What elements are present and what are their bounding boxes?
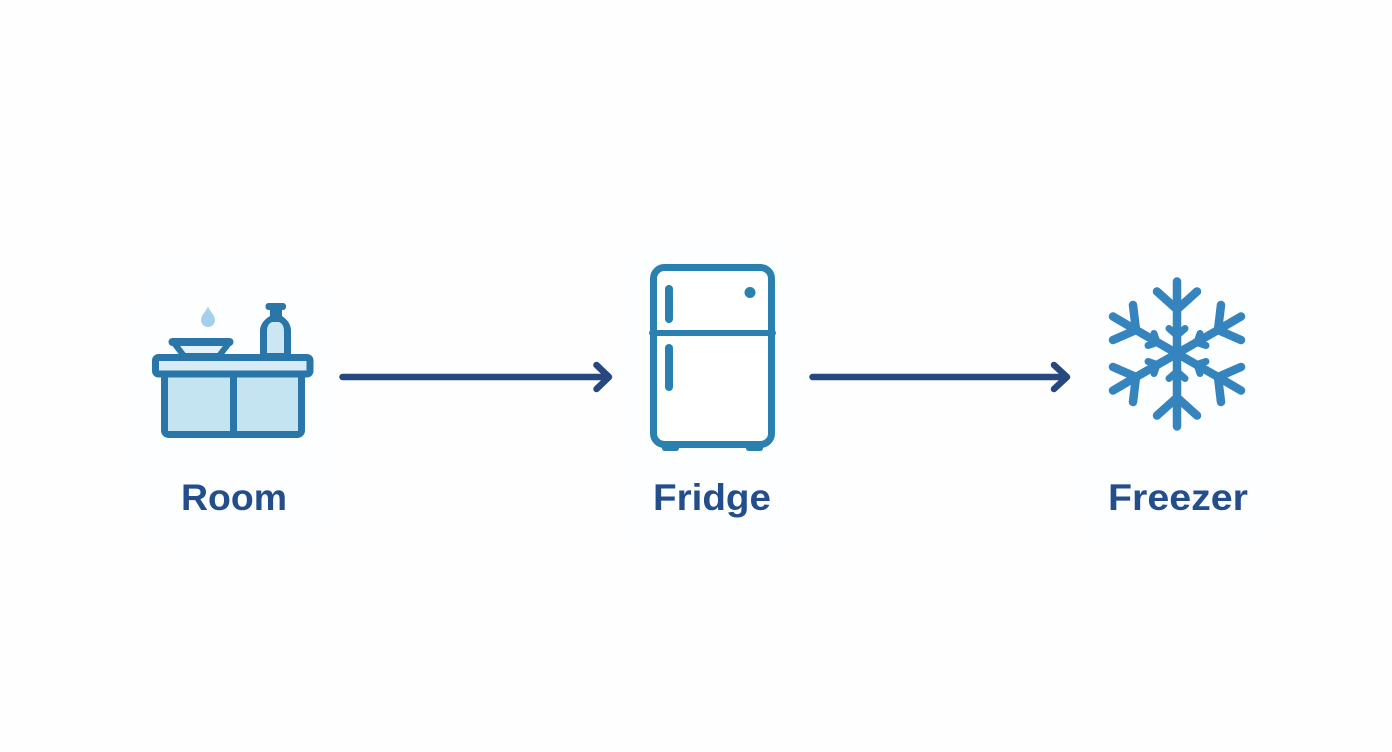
icon: fridge: [649, 268, 776, 451]
label: fridge: Fridge: [653, 477, 771, 518]
icon: indicator dot: [744, 287, 756, 298]
icon: kitchen counter: [156, 303, 310, 434]
icon: lower handle: [665, 344, 673, 391]
icon: fridge feet: [662, 442, 763, 451]
icon: countertop: [156, 358, 310, 374]
panel: fridge: [649, 268, 776, 518]
icon: bowl: [168, 338, 234, 356]
icon: snowflake: [1113, 282, 1241, 426]
icon: water drop: [201, 306, 215, 327]
panel: room: [156, 303, 310, 518]
icon: door divider: [649, 330, 776, 336]
arrow: fridge to freezer: [812, 365, 1067, 389]
panel: freezer: [1108, 282, 1248, 518]
label: freezer: Freezer: [1108, 477, 1248, 518]
icon: upper handle: [665, 285, 673, 323]
icon: bottle: [260, 303, 291, 357]
arrow: room to fridge: [342, 365, 609, 389]
icon: cabinet: [164, 372, 302, 434]
label: room: Room: [181, 477, 287, 518]
icon: fridge body: [654, 268, 772, 444]
